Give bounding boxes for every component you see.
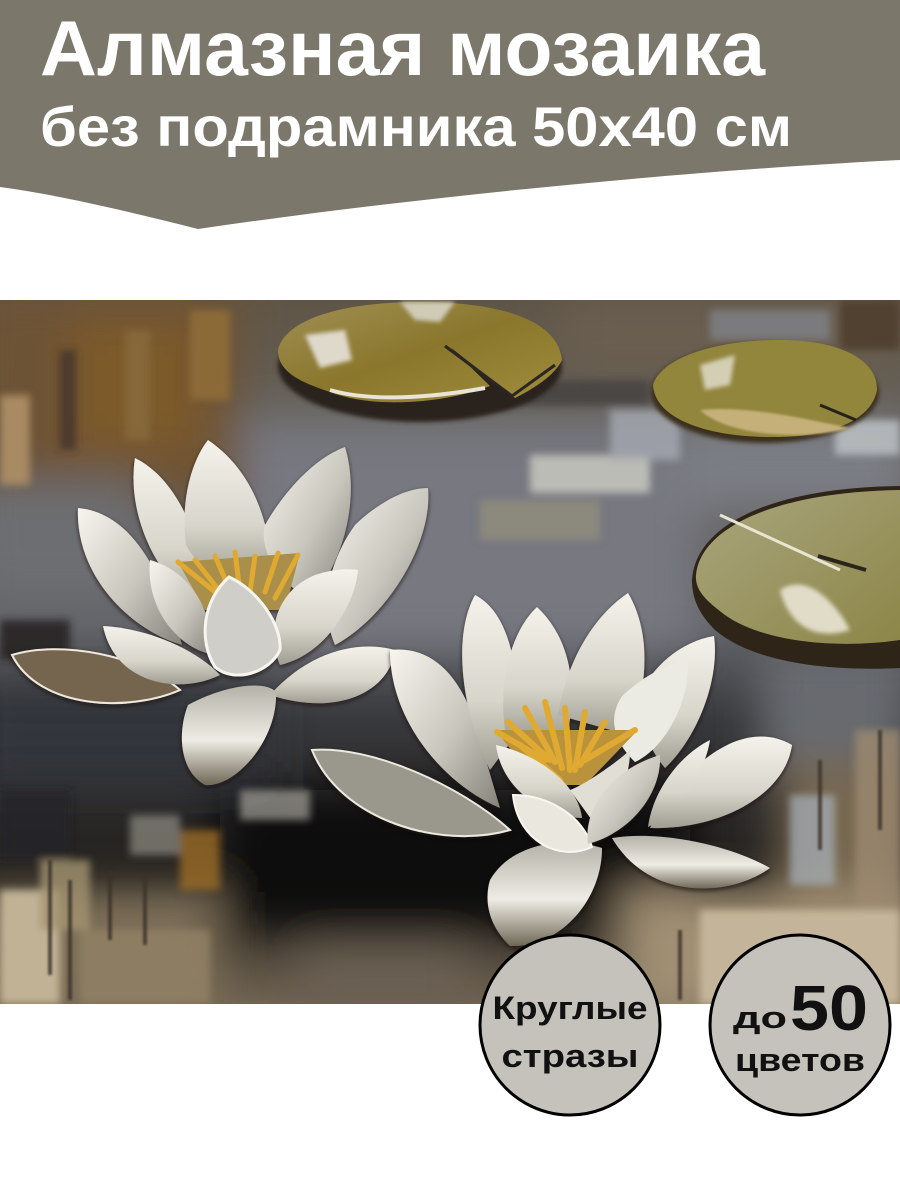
flower right <box>312 593 792 946</box>
badge: up to 50 colours: 50 <box>790 972 868 1044</box>
background washes <box>0 290 900 1020</box>
stamens <box>497 702 635 780</box>
badge: up to 50 colours <box>710 935 890 1115</box>
lily pad top right <box>651 340 879 443</box>
front petals <box>150 560 215 655</box>
lily pad right <box>692 486 900 669</box>
outer lower petals <box>312 750 510 836</box>
title: Алмазная мозаика <box>40 4 766 92</box>
back petals <box>390 650 500 808</box>
flower centre <box>495 730 638 785</box>
stamens <box>178 552 298 600</box>
header banner <box>0 0 900 229</box>
flower centre <box>178 553 300 610</box>
front petals <box>496 745 582 818</box>
badge: round rhinestones <box>480 935 660 1115</box>
drips <box>50 730 880 1000</box>
lily pad top centre <box>278 302 562 422</box>
subtitle: без подрамника 50х40 см <box>40 95 792 158</box>
badge: round rhinestones: стразы <box>502 1038 638 1074</box>
outer petals <box>12 649 180 703</box>
badge: up to 50 colours: цветов <box>735 1042 865 1078</box>
badge: up to 50 colours: до <box>733 1000 787 1035</box>
brush strokes <box>0 300 900 1004</box>
flower left <box>12 440 428 785</box>
back petals <box>78 508 182 645</box>
painting: water lilies <box>0 290 900 1020</box>
badge: round rhinestones: Круглые <box>492 990 648 1026</box>
